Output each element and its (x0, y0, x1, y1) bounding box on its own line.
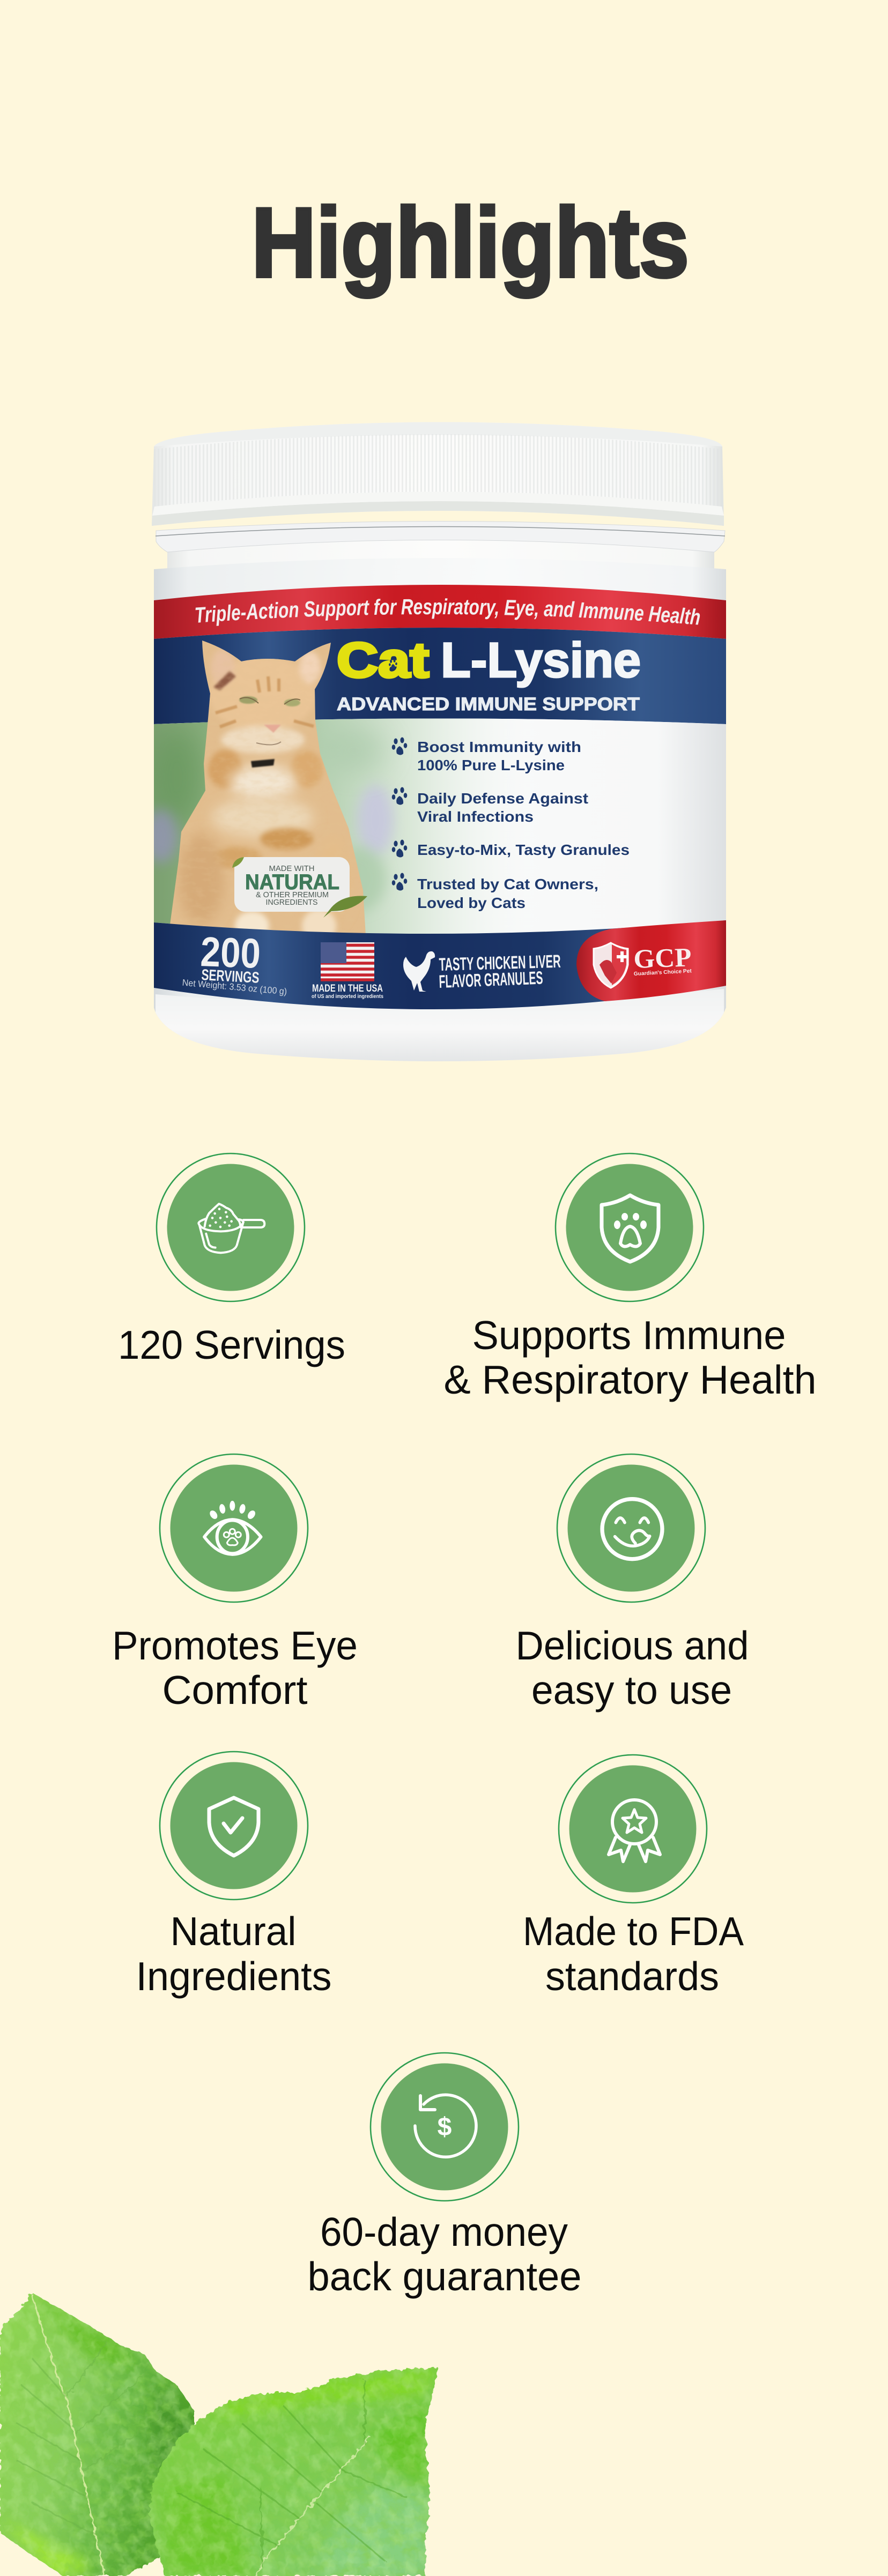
label: Cat L-Lysine heading (337, 633, 641, 688)
icon: refund arrow with dollar: $ (438, 2113, 452, 2141)
label (516, 1623, 749, 1713)
icon: ring and disc (559, 1755, 707, 1903)
label: 120 Servings (118, 1322, 345, 1367)
label: benefit bullets: Easy-to-Mix, Tasty Granules (417, 842, 630, 858)
label: natural badge: INGREDIENTS (266, 898, 317, 907)
label: flavor text: TASTY CHICKEN LIVER (439, 951, 561, 975)
label: Cat L-Lysine heading: Cat (337, 633, 429, 688)
label: Ingredients (136, 1954, 331, 1999)
label: natural badge: & OTHER PREMIUM (256, 890, 329, 899)
label: navy title band (154, 628, 726, 724)
label: servings: Net Weight: 3.53 oz (100 g) (182, 978, 287, 997)
highlight: money back guarantee (308, 2053, 581, 2299)
label: Natural (171, 1909, 296, 1954)
label: made in the USA: of US and imported ingredients (312, 994, 383, 1000)
label: benefit bullets: Trusted by Cat Owners, (417, 876, 598, 892)
icon: refund arrow with dollar (415, 2095, 476, 2157)
jar body (154, 558, 726, 1061)
label: Delicious and (516, 1623, 749, 1668)
highlight: delicious (516, 1454, 749, 1713)
icon: award ribbon (609, 1800, 660, 1862)
jar cap (152, 418, 726, 579)
label: Supports Immune (472, 1313, 786, 1358)
title: Highlights (251, 187, 689, 297)
label (308, 2209, 581, 2299)
label (136, 1909, 331, 1999)
icon: eye with paw (204, 1501, 261, 1554)
label: Made to FDA (523, 1909, 744, 1954)
icon: licking smile (602, 1499, 662, 1559)
label: made in the USA (312, 983, 383, 1000)
icon: shield with paw (602, 1195, 658, 1262)
label: Promotes Eye (112, 1623, 358, 1668)
label: & Respiratory Health (444, 1357, 816, 1402)
label: benefit bullets: Viral Infections (417, 808, 534, 825)
label: bottom navy band (154, 920, 726, 1009)
product jar (152, 422, 726, 1061)
label: benefit bullets: 100% Pure L-Lysine (417, 757, 565, 773)
label (112, 1623, 358, 1713)
label: flavor text (439, 951, 561, 992)
highlight: FDA standards (523, 1755, 744, 1999)
label: natural badge: MADE WITH (269, 864, 314, 873)
label: subtitle: ADVANCED IMMUNE SUPPORT (337, 694, 640, 714)
icon: ring and disc (160, 1454, 308, 1602)
label: benefit bullets: Loved by Cats (417, 895, 526, 911)
icon: ring and disc (556, 1153, 704, 1301)
label (444, 1313, 816, 1402)
icon: shield with check (209, 1798, 258, 1856)
highlight: natural ingredients (136, 1752, 331, 1999)
label: servings: 200 (199, 928, 261, 977)
label: red top band (154, 585, 726, 639)
icon: ring and disc (160, 1752, 308, 1900)
label: benefit bullets: Daily Defense Against (417, 790, 588, 807)
icon: ring and disc (157, 1153, 305, 1301)
label: back guarantee (308, 2254, 581, 2299)
label: natural badge: NATURAL (245, 870, 339, 894)
label: GCP logo text: Guardian's Choice Pet (634, 968, 692, 977)
icon: chicken (403, 951, 435, 992)
icon: scoop (198, 1204, 264, 1253)
icon: brand shield (594, 943, 628, 988)
highlight: 120 servings (118, 1153, 345, 1367)
label: Comfort (162, 1667, 308, 1713)
label (523, 1909, 744, 1999)
label: servings: SERVINGS (201, 966, 260, 987)
label: made in the USA: MADE IN THE USA (312, 983, 383, 994)
leaf: back left (0, 2289, 198, 2576)
label: natural badge (232, 857, 367, 918)
label: flavor text: FLAVOR GRANULES (439, 968, 543, 992)
icon: ring and disc (557, 1454, 705, 1602)
leaf: front right (145, 2364, 438, 2576)
label: GCP logo text: GCP (633, 942, 692, 974)
label: benefit bullets: Boost Immunity with (417, 739, 581, 755)
label: benefit bullets (392, 738, 630, 911)
highlight: eye comfort (112, 1454, 358, 1713)
highlight: immune and respiratory (444, 1153, 816, 1402)
label: red band text: Triple-Action Support for Respiratory, Eye, and Immune Health (195, 598, 700, 626)
label: red brand badge (576, 920, 726, 1001)
label: easy to use (531, 1667, 732, 1713)
label: standards (545, 1954, 719, 1999)
icon: US flag (321, 942, 374, 981)
label: photo area (154, 718, 726, 934)
label: 60-day money (320, 2209, 568, 2254)
label: servings (182, 928, 287, 997)
baseline arc for red band text (195, 614, 700, 625)
icon: ring and disc (371, 2053, 519, 2201)
label: Cat L-Lysine heading: L-Lysine (441, 633, 641, 688)
decorative leaves (0, 2289, 438, 2576)
cat photo (170, 641, 366, 943)
